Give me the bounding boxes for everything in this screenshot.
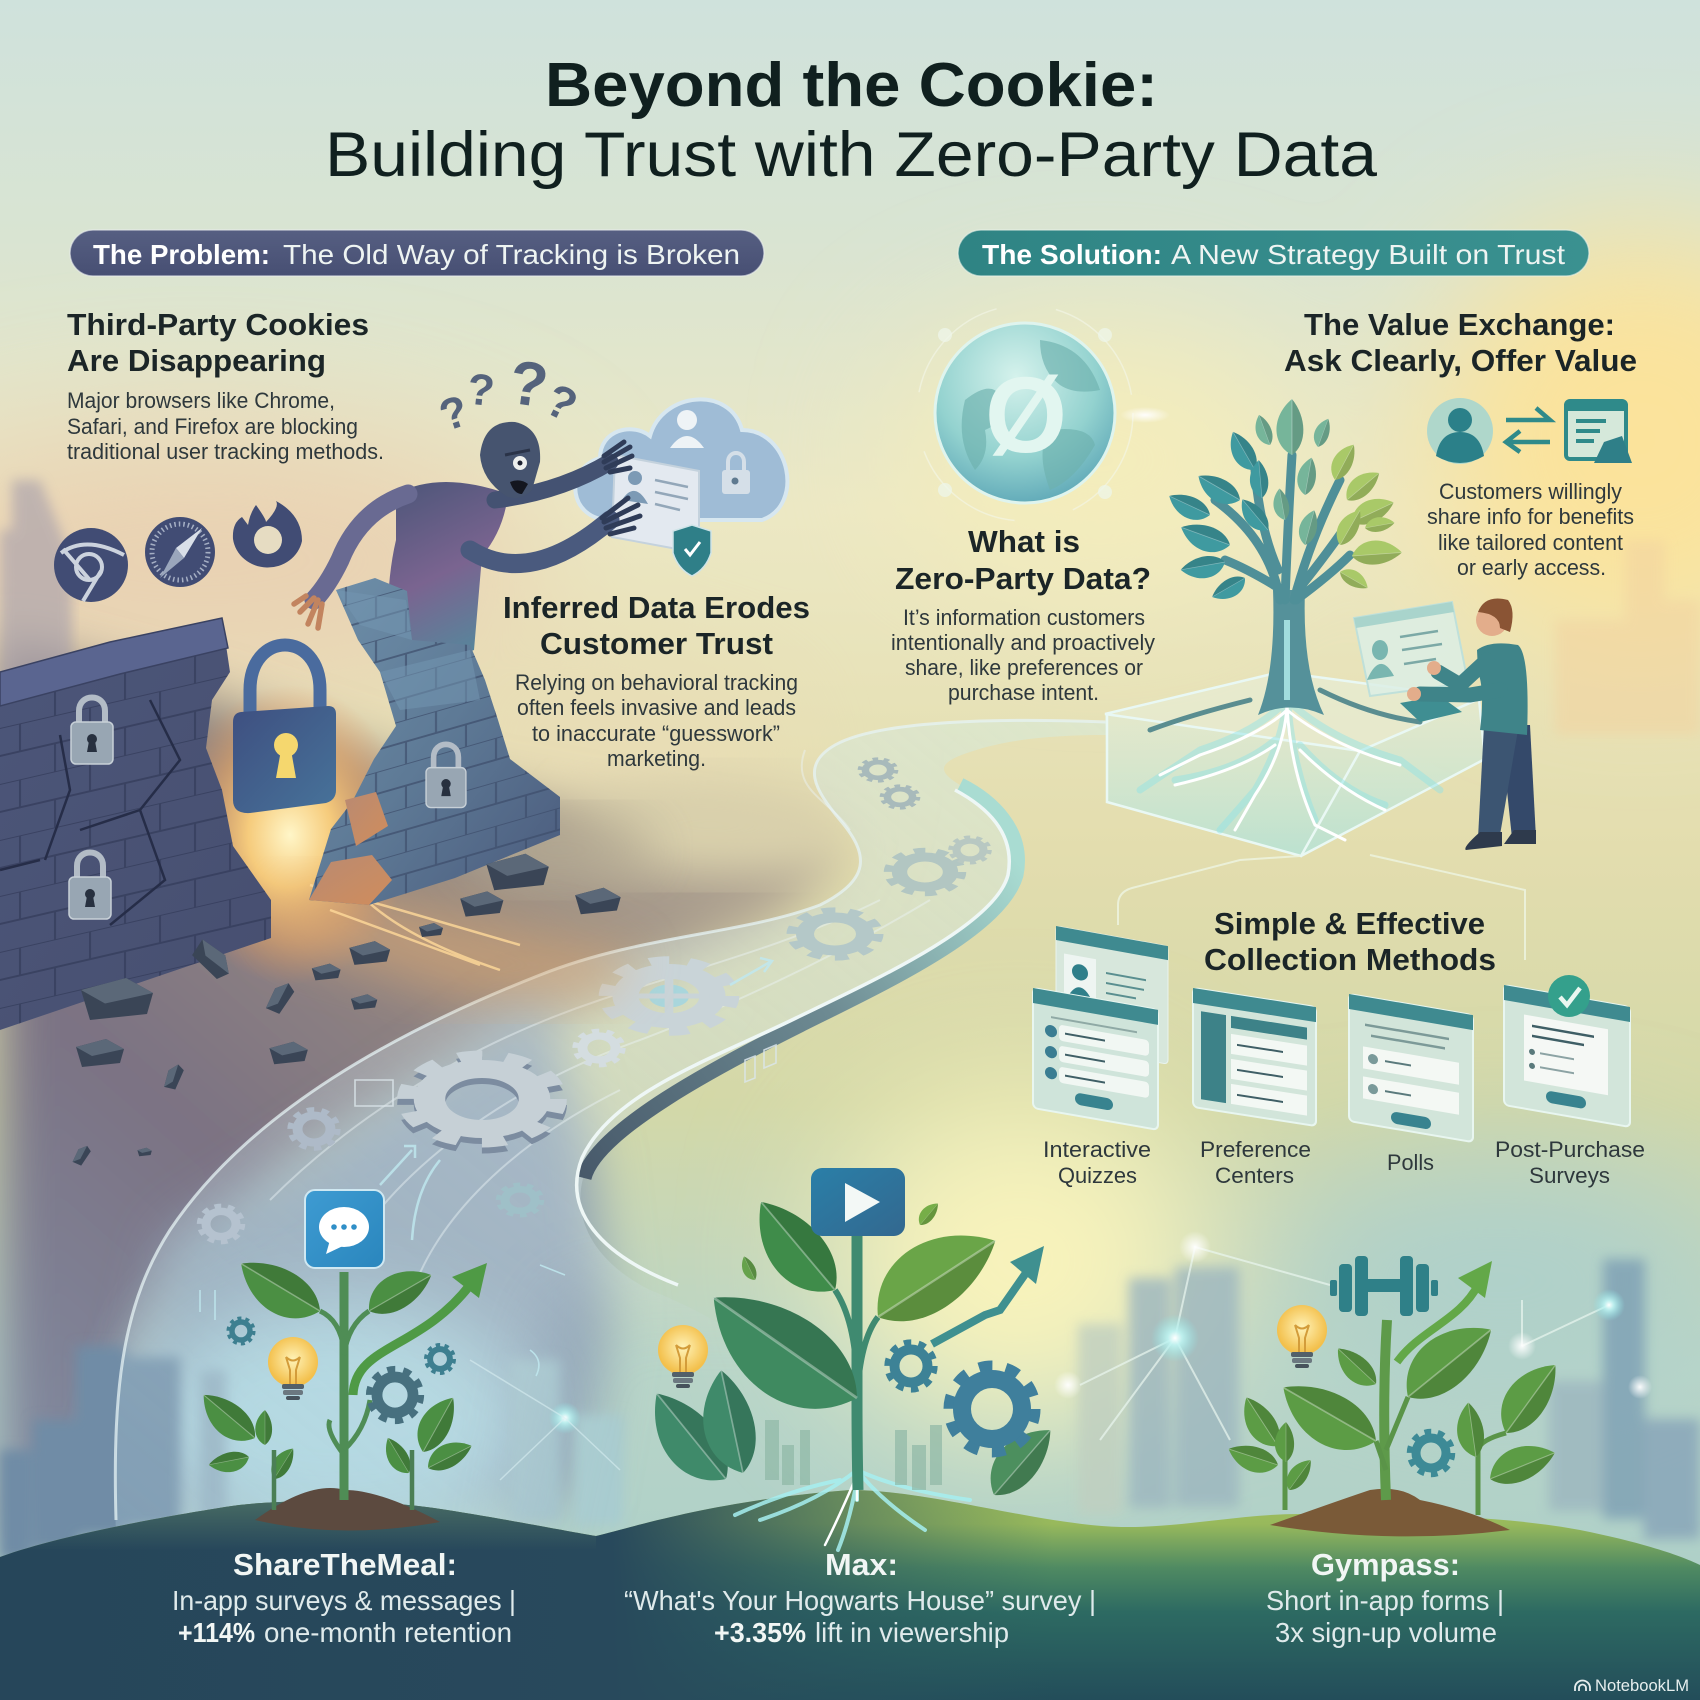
method labels: Preference — [1200, 1137, 1311, 1162]
globe — [917, 305, 1170, 521]
text: value exchange: or early access. — [1457, 555, 1606, 580]
banner: the solution: A New Strategy Built on Trust — [1171, 239, 1565, 270]
text: zero-party data: It’s information customers — [903, 605, 1145, 630]
banner: the problem — [70, 230, 764, 276]
shield — [673, 525, 711, 576]
text: inferred data: Customer Trust — [540, 626, 773, 661]
stem — [340, 1272, 348, 1500]
icon: form and gift — [1566, 401, 1632, 463]
icon: gear — [1410, 1432, 1452, 1474]
text: zero-party data: intentionally and proactively — [891, 630, 1155, 655]
skyline: upper right — [1555, 540, 1700, 735]
small padlock — [71, 698, 113, 764]
title: Beyond the Cookie: — [545, 51, 1158, 120]
method window: post-purchase surveys — [1504, 975, 1630, 1127]
method labels: Interactive — [1043, 1137, 1151, 1162]
question marks: ? — [537, 373, 586, 432]
text: value exchange: share info for benefits — [1427, 504, 1634, 529]
browser icons — [54, 501, 302, 602]
method labels: Polls — [1387, 1150, 1434, 1175]
icon: bulb — [1277, 1305, 1327, 1368]
text: inferred data: Relying on behavioral tracking — [515, 670, 798, 695]
skyline: lower right — [1078, 1259, 1700, 1539]
teal leaves — [1164, 427, 1274, 606]
gap glow — [170, 685, 640, 1000]
icon: firefox — [233, 501, 302, 568]
icon: chrome — [54, 528, 128, 602]
hills — [0, 1490, 1700, 1700]
mound — [1270, 1489, 1510, 1536]
case study: ShareTheMeal: +114% — [178, 1617, 255, 1648]
text: value exchange: like tailored content — [1438, 530, 1623, 555]
case study: Gympass — [1266, 1547, 1504, 1648]
floating screen — [1354, 602, 1468, 722]
rubble — [70, 854, 621, 1168]
network lines and glows — [470, 1231, 1652, 1480]
icon: safari — [145, 517, 215, 587]
leaves — [633, 1187, 1064, 1506]
icon: chat bubble — [305, 1190, 384, 1268]
mound — [255, 1488, 440, 1531]
padlock on rubble — [426, 744, 466, 808]
banner: the problem: The Problem: — [93, 239, 270, 270]
value exchange icons — [1427, 398, 1632, 464]
method labels: Surveys — [1529, 1163, 1610, 1188]
green leaves — [1251, 399, 1334, 547]
icon: check badge — [1548, 975, 1590, 1017]
method window: polls — [1349, 994, 1473, 1142]
road gears: small — [200, 759, 989, 1242]
head — [480, 422, 540, 498]
text: inferred data: to inaccurate “guesswork” — [532, 721, 780, 746]
skyline: lower left — [0, 1346, 623, 1560]
text: collection methods — [1204, 906, 1496, 977]
case study: Gympass: Gympass: — [1311, 1547, 1460, 1582]
icon: video play — [811, 1168, 905, 1236]
text: zero-party data: What is — [968, 524, 1080, 559]
big padlock — [233, 645, 336, 813]
watermark: NotebookLM: NotebookLM — [1595, 1676, 1689, 1695]
case study: Gympass: 3x sign-up volume — [1275, 1617, 1497, 1648]
text: value exchange: The Value Exchange: — [1304, 307, 1615, 342]
growth arrow — [353, 1263, 487, 1395]
road gear: large — [408, 1057, 556, 1147]
method window: preference centers — [1193, 988, 1316, 1126]
front window — [1033, 988, 1158, 1130]
crumbling wall: right — [309, 578, 560, 905]
skyline: upper left — [0, 480, 72, 710]
question marks: ? — [465, 365, 497, 416]
text: third-party cookies: Are Disappearing — [67, 343, 326, 378]
case study: ShareTheMeal: one-month retention — [264, 1617, 512, 1648]
leaves — [192, 1248, 476, 1483]
icon: bulb — [268, 1337, 318, 1400]
case study: ShareTheMeal — [172, 1547, 516, 1648]
tree — [1140, 399, 1440, 840]
road gear: wheel — [608, 962, 730, 1030]
mini city — [765, 1420, 942, 1490]
back window — [1056, 926, 1168, 1064]
method labels: Centers — [1215, 1163, 1294, 1188]
title — [325, 51, 1378, 190]
text: inferred data: often feels invasive and leads — [517, 695, 796, 720]
text: third-party cookies — [67, 307, 384, 464]
text: inferred data: marketing. — [607, 746, 706, 771]
case study: ShareTheMeal: In-app surveys & messages | — [172, 1585, 516, 1616]
case study: Max: “What's Your Hogwarts House” survey | — [624, 1585, 1096, 1616]
text: zero-party data: purchase intent. — [948, 680, 1099, 705]
data ribbon road — [115, 720, 1106, 1540]
method window: interactive quizzes — [1033, 926, 1168, 1130]
text: zero-party data: share, like preferences or — [905, 655, 1143, 680]
plant: Max — [633, 1168, 1064, 1550]
banner: the solution: The Solution: — [982, 239, 1162, 270]
title: Building Trust with Zero-Party Data — [325, 120, 1378, 190]
roots — [1140, 640, 1440, 840]
case study: Max: lift in viewership — [815, 1617, 1009, 1648]
plant: ShareTheMeal — [192, 1190, 487, 1531]
icon: dumbbell — [1330, 1256, 1438, 1316]
glowing roots — [735, 1400, 970, 1550]
trunk — [1258, 590, 1324, 715]
zero-party symbol: Ø — [985, 354, 1067, 475]
man at screen — [1407, 598, 1536, 850]
method labels: Quizzes — [1058, 1163, 1137, 1188]
banner: the problem: The Old Way of Tracking is Broken — [283, 239, 740, 270]
case study: Gympass: Short in-app forms | — [1266, 1585, 1504, 1616]
connector lines — [1118, 855, 1525, 960]
icon: bulb — [658, 1325, 708, 1388]
text: zero-party data: Zero-Party Data? — [895, 561, 1151, 596]
case study: Max — [624, 1547, 1096, 1648]
question marks: ? — [434, 386, 474, 441]
text: inferred data: Inferred Data Erodes — [503, 590, 810, 625]
glass data box — [1105, 672, 1485, 856]
document — [612, 455, 699, 553]
growth arrow — [1397, 1261, 1492, 1362]
crumbling wall: left — [0, 618, 271, 1030]
stem — [1384, 1320, 1387, 1500]
text: inferred data — [503, 590, 810, 771]
yellow-green leaves — [1325, 439, 1403, 594]
text: zero-party data — [891, 524, 1155, 705]
small padlock lower — [69, 852, 111, 919]
text: value exchange — [1284, 307, 1637, 580]
icon: gears — [228, 1318, 454, 1420]
text: third-party cookies: Third-Party Cookies — [67, 307, 369, 342]
method labels — [1043, 1137, 1645, 1188]
cloud with profile — [575, 399, 787, 576]
icon: gears — [888, 1343, 1034, 1451]
road arrows and glyphs — [200, 958, 776, 1376]
banner: the solution — [958, 230, 1589, 276]
branches — [1215, 455, 1350, 600]
text: third-party cookies: traditional user tracking methods. — [67, 439, 384, 464]
question marks: ? — [505, 348, 552, 421]
text: third-party cookies: Safari, and Firefox are blocking — [67, 414, 358, 439]
case study: Max: Max: — [825, 1547, 898, 1582]
text: third-party cookies: Major browsers like Chrome, — [67, 388, 335, 413]
icon: exchange arrows — [1506, 408, 1550, 452]
text: value exchange: Customers willingly — [1439, 479, 1622, 504]
zombie figure — [294, 422, 640, 680]
leaves — [1224, 1307, 1569, 1494]
text: value exchange: Ask Clearly, Offer Value — [1284, 343, 1637, 378]
method labels: Post-Purchase — [1495, 1137, 1645, 1162]
text: collection methods: Collection Methods — [1204, 942, 1496, 977]
plant: Gympass — [1224, 1256, 1569, 1536]
growth arrow — [932, 1246, 1044, 1344]
question marks — [434, 348, 586, 441]
icon: customer — [1427, 398, 1493, 464]
case study: Max: +3.35% — [714, 1617, 806, 1648]
case study: ShareTheMeal: ShareTheMeal: — [233, 1547, 457, 1582]
text: collection methods: Simple & Effective — [1214, 906, 1485, 941]
stem — [857, 1235, 858, 1490]
